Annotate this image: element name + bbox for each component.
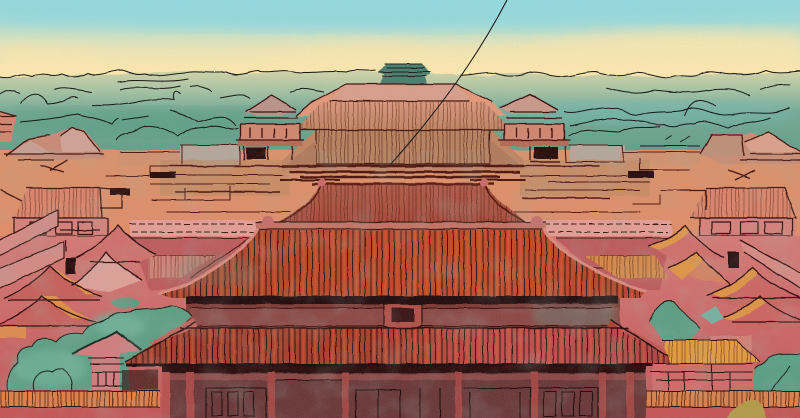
right low hall <box>680 188 796 238</box>
upper red roof <box>280 179 526 222</box>
thin diagonal line <box>390 0 507 165</box>
right side small roofs <box>648 226 800 330</box>
pink lower courtyard <box>0 220 800 418</box>
courtyard ink lines <box>106 145 700 212</box>
hall frieze <box>186 296 620 332</box>
hanging name plaque <box>384 304 422 332</box>
trees right <box>650 301 800 394</box>
distant gate tower <box>378 64 430 86</box>
hall wall <box>316 130 490 164</box>
left orange wall <box>0 391 160 418</box>
hill outlines <box>0 70 800 146</box>
side pavilions left <box>0 111 106 205</box>
sky <box>0 0 800 90</box>
mid-ground orange courtyards <box>0 145 800 240</box>
hall side eaves <box>282 110 524 170</box>
right orange wall <box>645 391 800 418</box>
right tower pavilion <box>498 94 570 160</box>
small pavilion in trees <box>72 332 158 390</box>
main red roof <box>158 216 646 298</box>
left low hall <box>12 188 122 238</box>
central back hall <box>280 84 525 180</box>
hall middle roof <box>296 102 512 130</box>
mottled colour wash <box>0 150 800 418</box>
trees left <box>8 298 192 390</box>
forest hills <box>0 70 800 170</box>
left tower pavilion <box>236 95 304 160</box>
hall upper roof <box>296 84 506 116</box>
crenellated walls <box>130 220 278 236</box>
palace front with doors <box>162 366 646 418</box>
left side small roofs <box>0 210 156 338</box>
lower red roof <box>125 318 680 365</box>
side pavilions right <box>700 132 800 180</box>
right orange-roofed hall <box>650 340 760 392</box>
